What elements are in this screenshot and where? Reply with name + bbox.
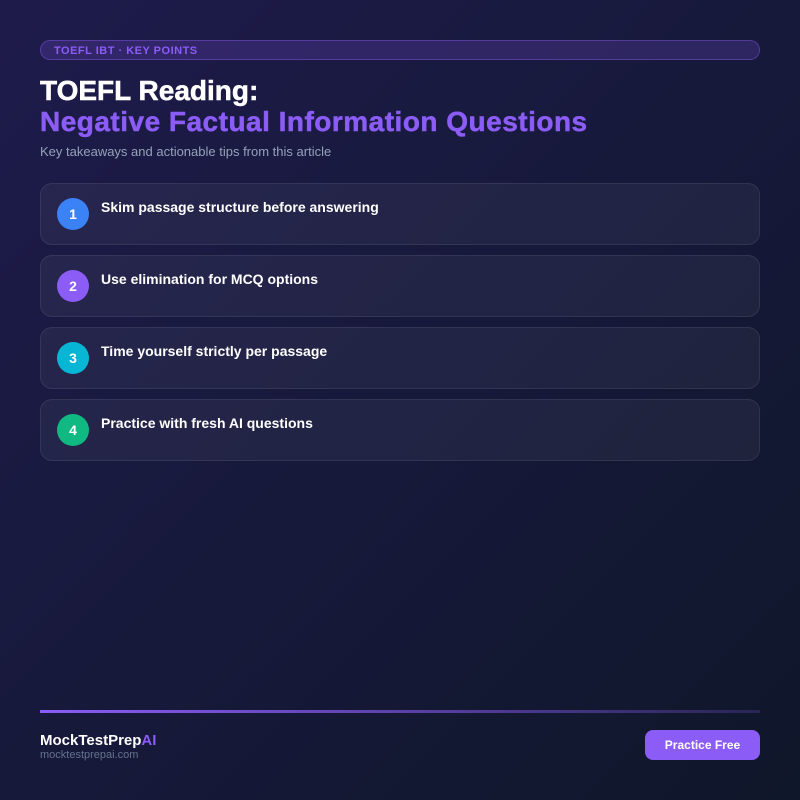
brand url: mocktestprepai.com (40, 749, 138, 761)
panel: tip 2 (40, 255, 760, 317)
badge: TOEFL iBT key points (40, 40, 760, 60)
icon: number 1: 1 (69, 206, 77, 222)
icon: number 1 (57, 198, 89, 230)
button: practice free (645, 730, 760, 760)
icon: number 2 (57, 270, 89, 302)
footer accent line (40, 710, 760, 713)
icon: number 3: 3 (69, 350, 77, 366)
badge: TOEFL iBT key points: TOEFL IBT · KEY POINTS (54, 45, 198, 57)
tip 4 text: Practice with fresh AI questions (101, 415, 313, 431)
icon: number 2: 2 (69, 278, 77, 294)
title: Negative Factual Information Questions (40, 106, 588, 137)
panel: tip 3 (40, 327, 760, 389)
subtitle: Key takeaways and actionable tips from this article (40, 144, 331, 159)
icon: number 3 (57, 342, 89, 374)
title: TOEFL Reading: (40, 75, 258, 106)
brand name: MockTestPrepAI (40, 732, 156, 749)
button: practice free: Practice Free (665, 738, 740, 752)
panel: tip 1 (40, 183, 760, 245)
icon: number 4 (57, 414, 89, 446)
icon: number 4: 4 (69, 422, 77, 438)
title (40, 75, 588, 138)
tip 3 text: Time yourself strictly per passage (101, 343, 327, 359)
tip 1 text: Skim passage structure before answering (101, 199, 379, 215)
tip 2 text: Use elimination for MCQ options (101, 271, 318, 287)
panel: tip 4 (40, 399, 760, 461)
